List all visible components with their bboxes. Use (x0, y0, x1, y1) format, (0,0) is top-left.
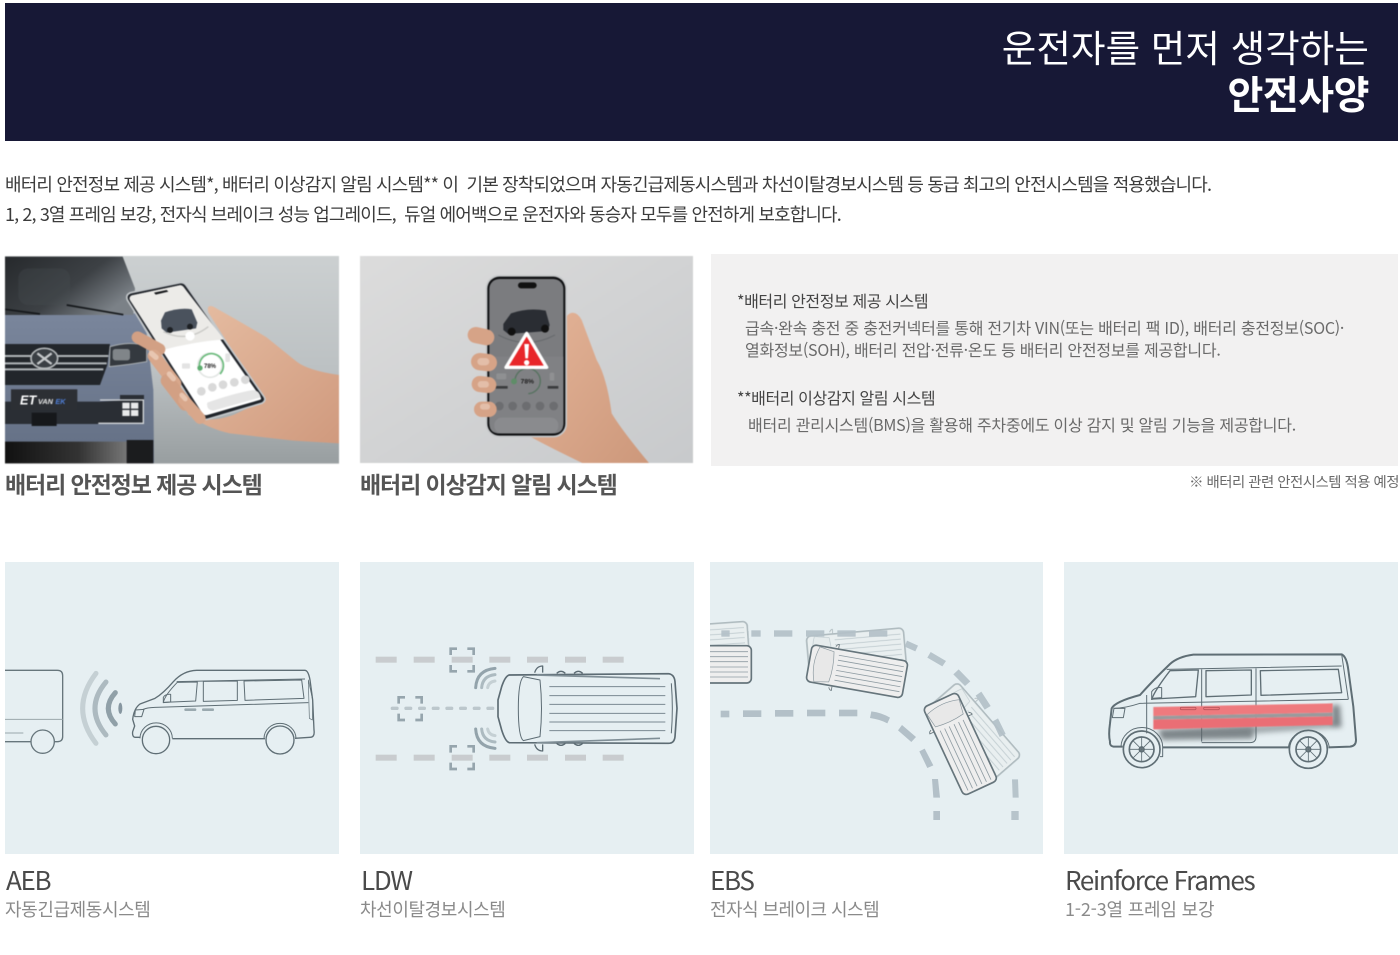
panel: AEB label (5, 861, 150, 922)
Reinforce Frames name: Reinforce Frames (1065, 861, 1254, 898)
panel: EBS label (710, 861, 879, 922)
detection brackets (399, 649, 474, 769)
panel: battery system notes (711, 254, 1398, 466)
fingers (138, 337, 200, 418)
header banner (5, 3, 1398, 141)
smartphone with dimmed screen: 78% (521, 378, 534, 385)
icon: red warning triangle (506, 333, 547, 367)
note 2 line: 배터리 관리시스템(BMS)을 활용해 주차중에도 이상 감지 및 알림 기능을 제공합니다. (748, 412, 1296, 436)
smartphone with dimmed screen (486, 275, 567, 437)
note 1 heading: *배터리 안전정보 제공 시스템 (737, 288, 928, 312)
title: bold line: 안전사양 (1227, 65, 1369, 121)
door handles (184, 708, 214, 711)
van side outline (1109, 654, 1356, 757)
note 1 line 1: 급속·완속 충전 중 충전커넥터를 통해 전기차 VIN(또는 배터리 팩 ID), 배터리 충전정보(SOC)· (745, 315, 1344, 339)
van front (5, 257, 154, 464)
road dashes, top curve (721, 630, 1019, 820)
frame shadow (1158, 705, 1342, 740)
smartphone with app: 78% (204, 364, 217, 370)
intro line 2: 1, 2, 3열 프레임 보강, 전자식 브레이크 성능 업그레이드, 듀얼 에어백으로 운전자와 동승자 모두를 안전하게 보호합니다. (5, 201, 841, 227)
EBS Korean name: 전자식 브레이크 시스템 (710, 896, 879, 922)
radar waves (83, 673, 122, 743)
EBS name: EBS (710, 861, 754, 898)
intro text (5, 171, 1211, 227)
smartphone with app (127, 283, 265, 419)
caption: battery safety info: 배터리 안전정보 제공 시스템 (5, 466, 262, 500)
panel: AEB illustration (5, 562, 339, 854)
panel: battery safety info photo (4, 256, 340, 464)
hand behind phone (530, 313, 649, 463)
truck ahead (5, 670, 63, 753)
LDW Korean name: 차선이탈경보시스템 (360, 896, 505, 922)
panel: LDW illustration (360, 562, 694, 854)
van top view (498, 666, 677, 751)
panel: Reinforce Frames label (1065, 861, 1255, 922)
panel: Reinforce Frames illustration (1064, 562, 1398, 854)
reinforced frame bars (1153, 703, 1333, 729)
badge (10, 388, 78, 406)
intro line 1: 배터리 안전정보 제공 시스템*, 배터리 이상감지 알림 시스템** 이 기본 장착되었으며 자동긴급제동시스템과 차선이탈경보시스템 등 동급 최고의 안전시스템을 적용했습니다. (5, 171, 1211, 197)
footnote: ※ 배터리 관련 안전시스템 적용 예정 (1189, 471, 1399, 492)
LDW name: LDW (361, 861, 412, 898)
lane dashes (376, 657, 624, 761)
note 2 heading: **배터리 이상감지 알림 시스템 (737, 385, 935, 409)
badge: EK (55, 397, 66, 406)
title: light line: 운전자를 먼저 생각하는 (1002, 18, 1369, 73)
caption: battery anomaly alert: 배터리 이상감지 알림 시스템 (360, 466, 617, 500)
AEB name: AEB (6, 861, 50, 898)
panel: battery anomaly alert photo (360, 256, 694, 464)
badge: ET (20, 393, 37, 407)
ghost vans (710, 620, 1020, 778)
badge: VAN (38, 397, 54, 406)
door handles (1180, 707, 1219, 710)
solid vans (710, 644, 998, 796)
centre sensor line (392, 703, 493, 713)
road dashes, lower curve (721, 710, 940, 820)
note 1 line 2: 열화정보(SOH), 배터리 전압·전류·온도 등 배터리 안전정보를 제공합니다. (745, 337, 1221, 361)
panel: EBS illustration (710, 562, 1043, 854)
hand behind phone (187, 306, 339, 443)
fingers (476, 335, 489, 409)
AEB Korean name: 자동긴급제동시스템 (5, 896, 150, 922)
panel: LDW label (360, 861, 505, 922)
van side view (133, 670, 314, 754)
sensor arcs (476, 668, 495, 748)
Reinforce Frames Korean name: 1-2-3열 프레임 보강 (1065, 896, 1214, 922)
wheels (1123, 730, 1327, 768)
